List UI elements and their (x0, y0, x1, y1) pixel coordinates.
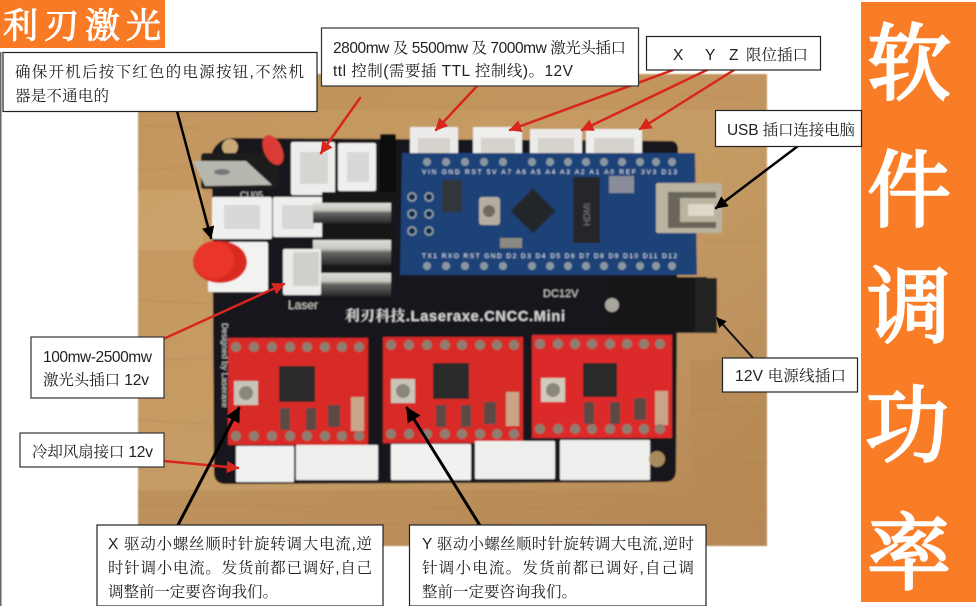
arrow: X limit (510, 70, 673, 130)
callout: laser port (31, 337, 164, 398)
laser connector (283, 249, 321, 295)
page edge line (0, 52, 2, 606)
arrow: cooling fan (164, 461, 238, 468)
DC jack (543, 277, 717, 333)
callout: USB: USB 插口连接电脑 (727, 120, 855, 139)
title banner: 软 (867, 17, 951, 111)
callout: limit ports: Z (729, 47, 738, 64)
board silk text: 利刃科技.Laseraxe.CNCC.Mini (345, 307, 565, 325)
arrow: X driver (178, 408, 239, 525)
bottom white connectors (236, 440, 650, 482)
callout: X driver: 时针调小电流。发货前都已调好,自己 (108, 559, 372, 577)
MOSFET heatsinks (313, 192, 394, 296)
reset button (479, 197, 500, 225)
board silk text (220, 298, 565, 408)
callout: TTL laser port: ttl 控制(需要插 TTL 控制线)。12V (333, 61, 574, 80)
arrow: USB (716, 146, 798, 208)
USB chip (573, 177, 600, 243)
stepper driver X (228, 338, 368, 445)
callout: TTL laser port: 2800mw 及 5500mw 及 7000mw 激光头插口 (333, 38, 626, 57)
black post (380, 134, 396, 194)
callout: cooling fan (20, 433, 164, 467)
arrow: power button (177, 111, 211, 238)
callout: X driver: 调整前一定要咨询我们。 (108, 582, 278, 601)
board silk text: Laser (288, 298, 318, 312)
callout: laser port: 100mw-2500mw (43, 349, 153, 366)
callout: X driver: X 驱动小螺丝顺时针旋转调大电流,逆 (108, 535, 372, 553)
bottom pins (423, 262, 676, 270)
title banner: 功 (865, 379, 949, 473)
callout: Y driver: 整前一定要咨询我们。 (422, 582, 577, 601)
USB port (656, 183, 722, 233)
ICSP holes (408, 193, 433, 235)
callout: limit ports (646, 36, 820, 70)
callout: limit ports: 限位插口 (746, 45, 808, 64)
arrow: Z limit (640, 70, 734, 129)
arrow: Y driver (407, 408, 484, 532)
title banner: 件 (867, 144, 951, 238)
Arduino Nano blue board: TX1 RXO RST GND D2 D3 D4 D5 D6 D7 D8 D9 D10 D11 D12 (422, 253, 677, 260)
callout: power button: 确保开机后按下红色的电源按钮,不然机 (15, 63, 304, 81)
callout: limit ports: X (673, 47, 684, 64)
voltage regulator with heatsink: CU05 (240, 190, 263, 200)
callout: Y driver (410, 525, 706, 606)
callout: 12V power: 12V 电源线插口 (735, 366, 846, 385)
black circuit board (212, 138, 678, 484)
stepper driver Y (383, 337, 523, 443)
arrow: Y limit (582, 70, 707, 130)
title banner (861, 2, 976, 602)
callout: 12V power (722, 358, 858, 392)
left white connectors (212, 197, 323, 239)
DC jack: DC12V (543, 288, 579, 300)
callout: Y driver: Y 驱动小螺丝顺时针旋转调大电流,逆时 (422, 535, 694, 553)
red LED (258, 132, 288, 168)
callout: limit ports: Y (705, 47, 715, 64)
board silk text: Designed by Laseraxe (220, 323, 230, 408)
arrow: laser TTL port 1 (321, 98, 360, 153)
callout: USB (716, 110, 862, 146)
power button (193, 241, 268, 292)
bottom right mounting hole (649, 451, 665, 467)
Arduino Nano blue board: VIN GND RST 5V A7 A6 A5 A4 A3 A2 A1 A0 REF 3V3 D13 (422, 169, 677, 176)
Arduino Nano blue board: HDMI (582, 203, 592, 226)
Arduino Nano blue board (400, 153, 697, 275)
voltage regulator with heatsink (193, 153, 279, 200)
callout: Y driver: 针调小电流。发货前都已调好,自己调 (422, 559, 694, 577)
arrow: laser TTL port 2 (436, 86, 477, 130)
arrow: laser port (161, 284, 284, 340)
stepper driver Z (532, 335, 672, 438)
wood background (138, 74, 767, 546)
MCU chip (510, 188, 556, 234)
callout: cooling fan: 冷却风扇接口 12v (32, 443, 153, 461)
top-left white connectors (291, 142, 376, 195)
top pins (423, 158, 676, 166)
arrow: 12V power (717, 318, 753, 358)
title banner: 调 (867, 260, 951, 354)
callout: power button (3, 52, 317, 112)
photo: laser controller board (138, 74, 767, 546)
callout: power button: 器是不通电的 (15, 87, 109, 105)
callout: laser port: 激光头插口 12v (43, 370, 149, 389)
title banner: 率 (867, 507, 951, 601)
arrows (161, 70, 798, 532)
callout: TTL laser port (322, 28, 638, 86)
top white connectors (410, 127, 642, 157)
callout: X driver (97, 525, 383, 606)
logo: 利刃激光 (3, 0, 161, 49)
mounting hole (222, 139, 238, 155)
